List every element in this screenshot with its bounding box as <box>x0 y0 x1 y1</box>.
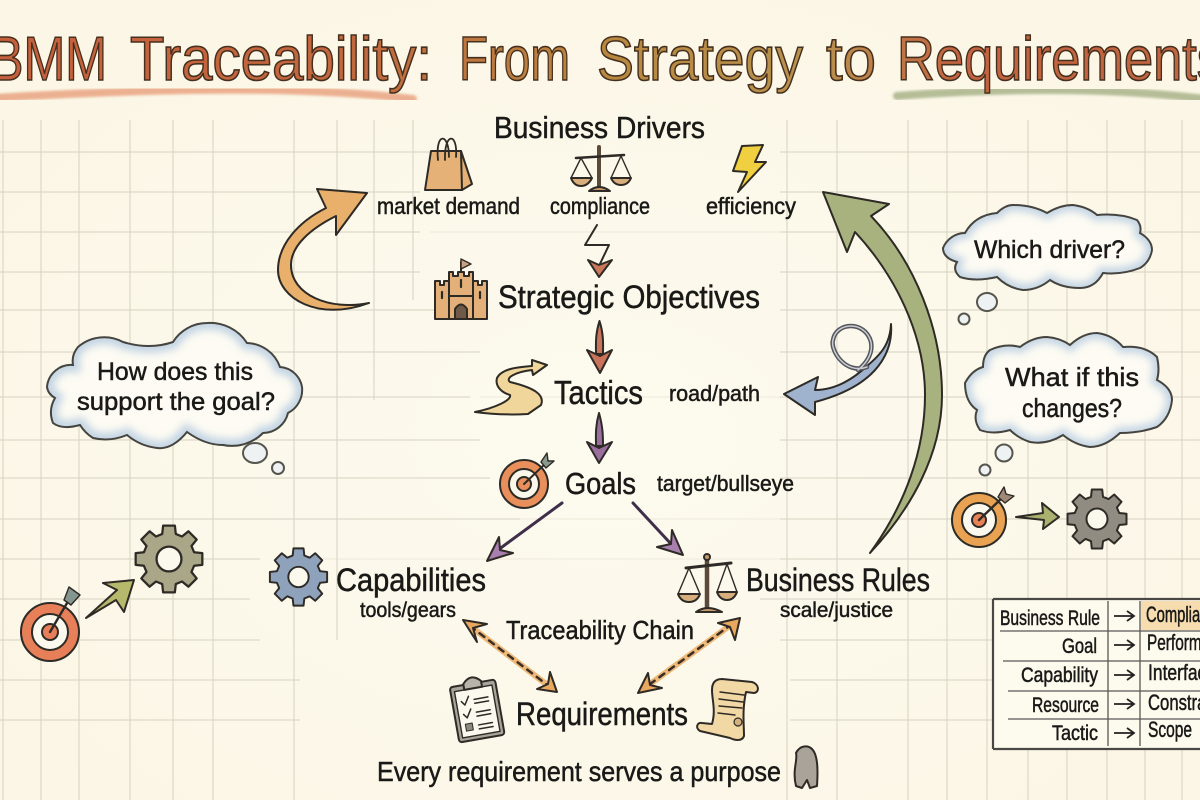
icon: shopping bag <box>425 139 472 190</box>
mapping table <box>993 599 1200 749</box>
heading: Capabilities: Capabilities <box>336 562 486 598</box>
icon: business rules scales <box>678 554 737 612</box>
thought bubble: which driver <box>940 200 1155 324</box>
table row: Resource <box>1032 690 1200 717</box>
title: From <box>459 25 570 94</box>
bubble trail <box>958 293 997 324</box>
table row: Goal <box>1062 630 1200 658</box>
arrow: zigzag from drivers to objectives <box>585 225 612 277</box>
arrow: capabilities to requirements <box>463 620 557 692</box>
arrow: large green feedback <box>823 192 942 553</box>
title: Strategy <box>597 25 803 94</box>
bubble text: Which driver? <box>974 236 1125 264</box>
heading: Goals: Goals <box>565 466 636 501</box>
arrow: goals to capabilities <box>487 503 562 561</box>
table row: Business Rule <box>1000 602 1200 630</box>
heading: Requirements: Requirements <box>516 696 688 732</box>
title underline: orange brush <box>0 90 413 99</box>
arrow: objectives to tactics <box>587 321 612 373</box>
icon: left gear <box>136 526 202 592</box>
heading: Tactics: Tactics <box>554 374 643 411</box>
label: road/path: road/path <box>669 381 760 406</box>
bubble trail <box>243 443 284 474</box>
icon: grey figure <box>795 746 817 788</box>
title: Traceability: <box>130 25 432 94</box>
icon: right target <box>952 487 1014 547</box>
title underline: green brush <box>897 90 1200 99</box>
table row: Business Rule: Business Rule <box>1000 607 1100 630</box>
label: scale/justice: scale/justice <box>780 599 893 622</box>
icon: capabilities gear <box>270 548 327 606</box>
table row: Goal: Goal <box>1062 635 1097 658</box>
table row: Tactic: Tactic <box>1052 722 1098 745</box>
bubble text: What if this <box>1005 362 1139 392</box>
icon: compliance scales <box>571 147 631 191</box>
arrow: goals to business rules <box>633 503 683 555</box>
heading: Business Rules: Business Rules <box>746 562 930 598</box>
icon: left target <box>21 587 80 661</box>
icon: scroll <box>697 679 758 740</box>
arrow: business rules to requirements <box>638 618 740 693</box>
icon: lightning bolt <box>733 145 766 192</box>
icon: castle <box>435 259 487 319</box>
label: market demand: market demand <box>377 193 520 219</box>
label: tools/gears: tools/gears <box>360 599 456 622</box>
label: Traceability Chain: Traceability Chain <box>506 615 694 645</box>
heading: Strategic Objectives: Strategic Objectives <box>498 279 760 315</box>
icon: winding road <box>475 360 547 414</box>
title: to <box>826 25 876 94</box>
table row: Capability: Capability <box>1021 664 1098 687</box>
arrow: left target to gear <box>86 580 134 618</box>
icon: goals target <box>500 453 554 508</box>
arrow: right target to gear <box>1016 503 1059 529</box>
table row: Tactic <box>1052 717 1192 745</box>
arrow: tactics to goals <box>587 413 612 463</box>
arrow: blue swirl <box>784 324 891 415</box>
label: compliance: compliance <box>550 193 650 219</box>
table row: Resource: Resource <box>1032 694 1099 717</box>
table row: Capability <box>1021 660 1200 687</box>
arrow: curved orange feedback <box>278 189 369 310</box>
label: efficiency: efficiency <box>706 193 796 219</box>
icon: clipboard checklist <box>449 674 505 743</box>
bubble trail <box>980 444 1012 476</box>
table arrows <box>1114 611 1134 738</box>
bubble text: How does this <box>97 358 253 386</box>
thought bubble: goal support <box>40 320 310 474</box>
bubble text: support the goal? <box>77 388 275 416</box>
label: target/bullseye: target/bullseye <box>657 471 794 496</box>
icon: right gear <box>1068 490 1126 548</box>
thought bubble: what if this changes <box>960 330 1175 476</box>
bubble text: changes? <box>1022 393 1122 423</box>
heading: Business Drivers: Business Drivers <box>494 110 705 145</box>
tagline: Every requirement serves a purpose <box>377 756 781 787</box>
